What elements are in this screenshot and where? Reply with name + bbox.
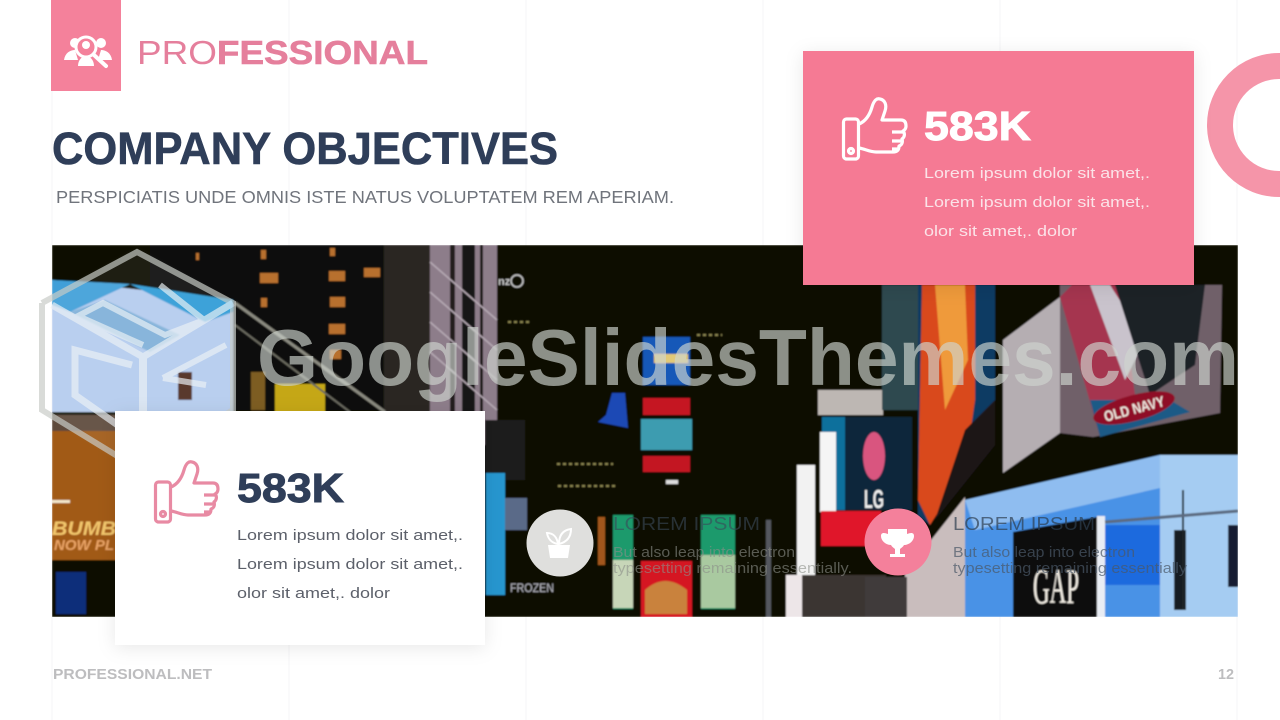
gray poster: [1003, 297, 1060, 473]
page number: 12: [1218, 667, 1234, 683]
decorative pink ring: [1220, 66, 1280, 184]
gray and mauve building: [384, 245, 525, 480]
icon: potted plant: [526, 510, 594, 576]
description: typesetting remaining essentially: [953, 561, 1188, 577]
icon: trophy: [864, 508, 932, 576]
description: But also leap into electron: [953, 545, 1135, 561]
description: Lorem ipsum dolor sit amet,.: [237, 527, 463, 544]
icon: thumbs up: [844, 99, 906, 159]
icon: thumbs up: [156, 462, 218, 522]
watermark: cube logo: [42, 250, 233, 470]
center screens: [508, 322, 771, 617]
left tower with lit windows: [150, 245, 384, 410]
brand name: PROFESSIONAL: [137, 35, 428, 72]
logo block: [51, 0, 121, 91]
blue side sign: [486, 473, 554, 595]
feature: lorem ipsum plant: [526, 510, 852, 577]
orange face billboard: [918, 285, 995, 525]
LG billboard: [786, 285, 918, 617]
photo: city billboards at night: [52, 245, 1238, 617]
footer brand: PROFESSIONAL.NET: [53, 667, 212, 683]
blue side sign: FROZEN: [510, 581, 554, 595]
description: olor sit amet,. dolor: [237, 585, 390, 602]
orange sign left: BUMB: [52, 519, 116, 540]
old navy poster: OLD NAVY: [1102, 393, 1167, 426]
title: COMPANY OBJECTIVES: [52, 123, 558, 174]
description: Lorem ipsum dolor sit amet,.: [237, 556, 463, 573]
description: olor sit amet,. dolor: [924, 223, 1077, 240]
stat value: 583K: [237, 465, 344, 511]
description: Lorem ipsum dolor sit amet,.: [924, 165, 1150, 182]
yellow sign and railing: [235, 303, 385, 414]
description: But also leap into electron: [613, 545, 795, 561]
blue left billboard: [52, 280, 233, 412]
icon: people with magnifier: [64, 37, 112, 66]
subtitle: PERSPICIATIS UNDE OMNIS ISTE NATUS VOLUPTATEM REM APERIAM.: [56, 187, 674, 207]
orange sign left: NOW PL: [54, 537, 114, 554]
blue store front: [865, 455, 1238, 617]
panel: white stat card: [115, 411, 485, 645]
old navy poster: [1060, 285, 1222, 437]
LG billboard: LG: [864, 484, 884, 514]
heading: LOREM IPSUM: [953, 514, 1095, 534]
orange sign left: [52, 415, 122, 614]
description: typesetting remaining essentially.: [613, 561, 852, 577]
gray and mauve building: nz: [498, 276, 511, 288]
feature: lorem ipsum trophy: [864, 508, 1188, 577]
heading: LOREM IPSUM: [613, 514, 760, 534]
description: Lorem ipsum dolor sit amet,.: [924, 194, 1150, 211]
blue store front: GAP: [1033, 558, 1079, 614]
panel: pink stat card: [803, 51, 1194, 285]
stat value: 583K: [924, 103, 1031, 149]
watermark: site name: GoogleSlidesThemes.com: [257, 313, 1239, 402]
